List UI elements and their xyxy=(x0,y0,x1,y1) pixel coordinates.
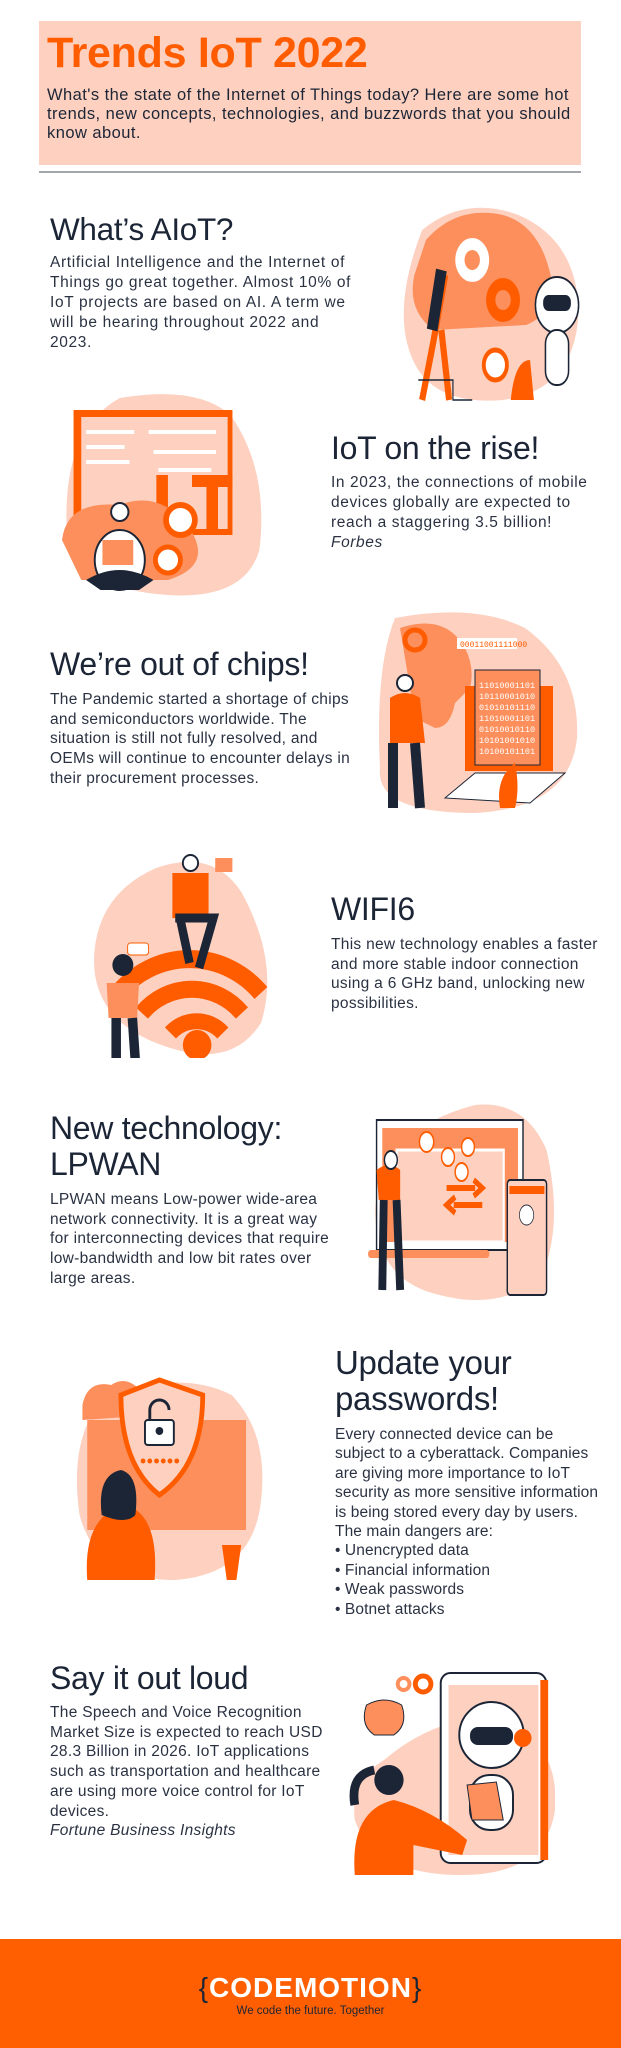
illustration: binary screen with man: 00011001111000 xyxy=(460,641,527,650)
passwords text and bullet list: The main dangers are: xyxy=(335,1523,493,1540)
IoT on the rise text: In 2023, the connections of mobile xyxy=(331,474,588,491)
passwords text and bullet list: subject to a cyberattack. Companies xyxy=(335,1445,588,1462)
chips text: and semiconductors worldwide. The xyxy=(50,711,307,728)
LPWAN heading: New technology: xyxy=(50,1110,282,1146)
passwords heading: Update your xyxy=(335,1344,511,1381)
AIoT text: will be hearing throughout 2022 and xyxy=(50,314,319,331)
passwords text and bullet list xyxy=(335,1426,598,1618)
passwords text and bullet list: • Financial information xyxy=(335,1562,490,1579)
title: Trends IoT 2022 xyxy=(47,29,368,77)
passwords text and bullet list: • Botnet attacks xyxy=(335,1601,445,1618)
LPWAN heading: LPWAN xyxy=(50,1146,161,1182)
Say it out loud text: devices. xyxy=(50,1803,109,1820)
illustration: IoT screen with gears xyxy=(62,394,262,596)
intro text xyxy=(47,86,571,142)
illustration: screens with arrows xyxy=(368,1104,554,1300)
LPWAN text xyxy=(50,1191,329,1287)
logo: {CODEMOTION} xyxy=(199,1972,422,2003)
passwords text and bullet list: Every connected device can be xyxy=(335,1426,553,1443)
passwords text and bullet list: security as more sensitive information xyxy=(335,1484,598,1501)
passwords text and bullet list: is being stored every day by users. xyxy=(335,1504,578,1521)
AIoT text: 2023. xyxy=(50,334,92,351)
AIoT text: Artificial Intelligence and the Internet of xyxy=(50,254,345,271)
chips heading: We’re out of chips! xyxy=(50,646,309,682)
LPWAN text: for interconnecting devices that require xyxy=(50,1230,329,1247)
IoT on the rise text xyxy=(331,474,588,551)
chips text: their procurement processes. xyxy=(50,770,259,787)
IoT on the rise text: Forbes xyxy=(331,534,383,551)
IoT on the rise text: devices globally are expected to xyxy=(331,494,571,511)
Say it out loud text: Market Size is expected to reach USD xyxy=(50,1724,323,1741)
LPWAN heading xyxy=(50,1110,282,1182)
IoT on the rise heading: IoT on the rise! xyxy=(331,430,539,466)
WIFI6 text: using a 6 GHz band, unlocking new xyxy=(331,975,585,992)
AIoT text: Things go great together. Almost 10% of xyxy=(50,274,351,291)
chips text: The Pandemic started a shortage of chips xyxy=(50,691,349,708)
chips text xyxy=(50,691,350,787)
LPWAN text: network connectivity. It is a great way xyxy=(50,1211,317,1228)
illustration: AI brain with gears and robot xyxy=(404,208,580,401)
chips text: OEMs will continue to encounter delays in xyxy=(50,750,350,767)
Say it out loud heading: Say it out loud xyxy=(50,1660,248,1696)
LPWAN text: large areas. xyxy=(50,1270,135,1287)
LPWAN text: LPWAN means Low-power wide-area xyxy=(50,1191,317,1208)
AIoT text: IoT projects are based on AI. A term we xyxy=(50,294,346,311)
illustration: binary screen with man: 01010010110 xyxy=(479,725,535,735)
intro text: know about. xyxy=(47,124,141,142)
illustration: binary screen with man: 10110001010 xyxy=(479,692,535,702)
Say it out loud text: Fortune Business Insights xyxy=(50,1822,236,1839)
WIFI6 text xyxy=(331,936,598,1012)
Say it out loud text: The Speech and Voice Recognition xyxy=(50,1704,302,1721)
AIoT heading: What’s AIoT? xyxy=(50,211,233,247)
Say it out loud text: are using more voice control for IoT xyxy=(50,1783,305,1800)
passwords text and bullet list: • Weak passwords xyxy=(335,1581,464,1598)
passwords text and bullet list: are giving more importance to IoT xyxy=(335,1465,570,1482)
intro text: trends, new concepts, technologies, and buzzwords that you should xyxy=(47,105,571,123)
header panel xyxy=(39,21,581,165)
illustration: binary screen with man: 11010001101 xyxy=(479,681,535,691)
illustration: shield with padlock xyxy=(76,1377,262,1580)
passwords text and bullet list: • Unencrypted data xyxy=(335,1542,469,1559)
illustration: binary screen with man xyxy=(379,612,578,813)
illustration: wifi with people xyxy=(94,854,268,1058)
AIoT text xyxy=(50,254,351,351)
illustration: binary screen with man: 11010001101 xyxy=(479,714,535,724)
illustration: woman with voice robot on phone xyxy=(350,1672,555,1875)
footer xyxy=(0,1939,621,2048)
Say it out loud text xyxy=(50,1704,323,1839)
Say it out loud text: 28.3 Billion in 2026. IoT applications xyxy=(50,1743,309,1760)
WIFI6 heading: WIFI6 xyxy=(331,891,415,927)
illustration: binary screen with man: 01010101110 xyxy=(479,703,535,713)
intro text: What's the state of the Internet of Things today? Here are some hot xyxy=(47,86,569,104)
passwords heading xyxy=(335,1344,512,1417)
WIFI6 text: and more stable indoor connection xyxy=(331,956,579,973)
WIFI6 text: possibilities. xyxy=(331,995,419,1012)
tagline: We code the future. Together xyxy=(237,2005,384,2017)
illustration: binary screen with man: 10100101101 xyxy=(479,747,535,757)
IoT on the rise text: reach a staggering 3.5 billion! xyxy=(331,514,552,531)
WIFI6 text: This new technology enables a faster xyxy=(331,936,598,953)
LPWAN text: low-bandwidth and low bit rates over xyxy=(50,1250,312,1267)
passwords heading: passwords! xyxy=(335,1380,499,1417)
chips text: situation is still not fully resolved, and xyxy=(50,730,318,747)
Say it out loud text: such as transportation and healthcare xyxy=(50,1763,320,1780)
illustration: binary screen with man: 10101001010 xyxy=(479,736,535,746)
